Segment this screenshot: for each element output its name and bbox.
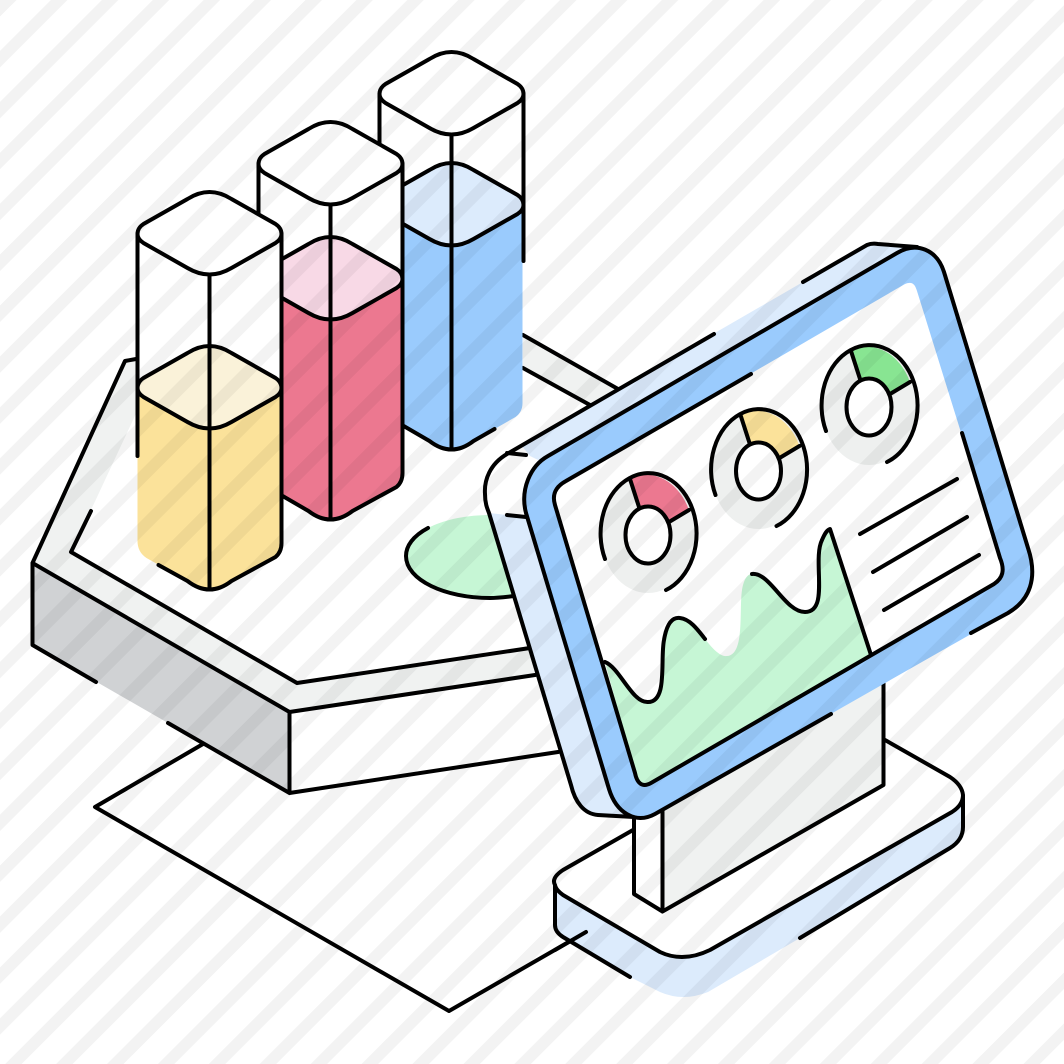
tray outlines xyxy=(32,335,618,793)
donut gauge red xyxy=(600,473,697,593)
liquid surface xyxy=(138,346,282,428)
text lines xyxy=(860,479,979,610)
monitor back corner xyxy=(485,454,552,520)
liquid surface xyxy=(380,163,524,246)
tray left side face xyxy=(32,563,290,793)
glass edges xyxy=(258,164,402,520)
donut gauge green xyxy=(822,345,918,465)
frame outer outline xyxy=(524,248,1032,818)
stand side face xyxy=(634,800,662,912)
base side xyxy=(555,795,963,997)
glass edges xyxy=(138,234,282,590)
yellow liquid column xyxy=(138,192,282,590)
glass body xyxy=(380,94,524,260)
blue liquid xyxy=(380,205,522,450)
base top xyxy=(555,740,964,957)
tray top surface xyxy=(33,335,640,712)
lid xyxy=(138,192,282,274)
monitor xyxy=(485,244,1032,818)
lid xyxy=(380,52,524,134)
frame inner outline xyxy=(554,374,1003,785)
yellow liquid xyxy=(138,388,282,590)
area chart line xyxy=(605,529,871,702)
floor line over base xyxy=(555,932,586,950)
green puddle on tray xyxy=(406,515,574,598)
lid xyxy=(258,122,402,204)
glass body xyxy=(138,234,282,400)
area chart fill xyxy=(605,529,871,785)
monitor base xyxy=(554,740,964,997)
tray back rim band xyxy=(523,335,618,406)
hexagonal tray xyxy=(32,335,640,793)
donut gauge yellow xyxy=(711,409,807,529)
monitor top depth xyxy=(521,244,917,500)
stand outlines xyxy=(634,670,884,912)
floor plane outline xyxy=(95,744,586,1011)
glass body xyxy=(258,164,402,300)
monitor stand xyxy=(634,670,884,912)
monitor depth outlines xyxy=(485,244,917,817)
blue screen frame xyxy=(524,248,1032,818)
glass edges xyxy=(380,94,524,450)
screen xyxy=(554,283,1003,785)
base outlines xyxy=(554,740,963,977)
monitor left depth xyxy=(489,513,640,817)
blue liquid column xyxy=(380,52,524,450)
red liquid column xyxy=(258,122,402,520)
stand front face xyxy=(662,670,884,912)
liquid surface xyxy=(258,237,402,320)
tray rim band xyxy=(32,358,535,712)
red liquid xyxy=(258,280,402,520)
